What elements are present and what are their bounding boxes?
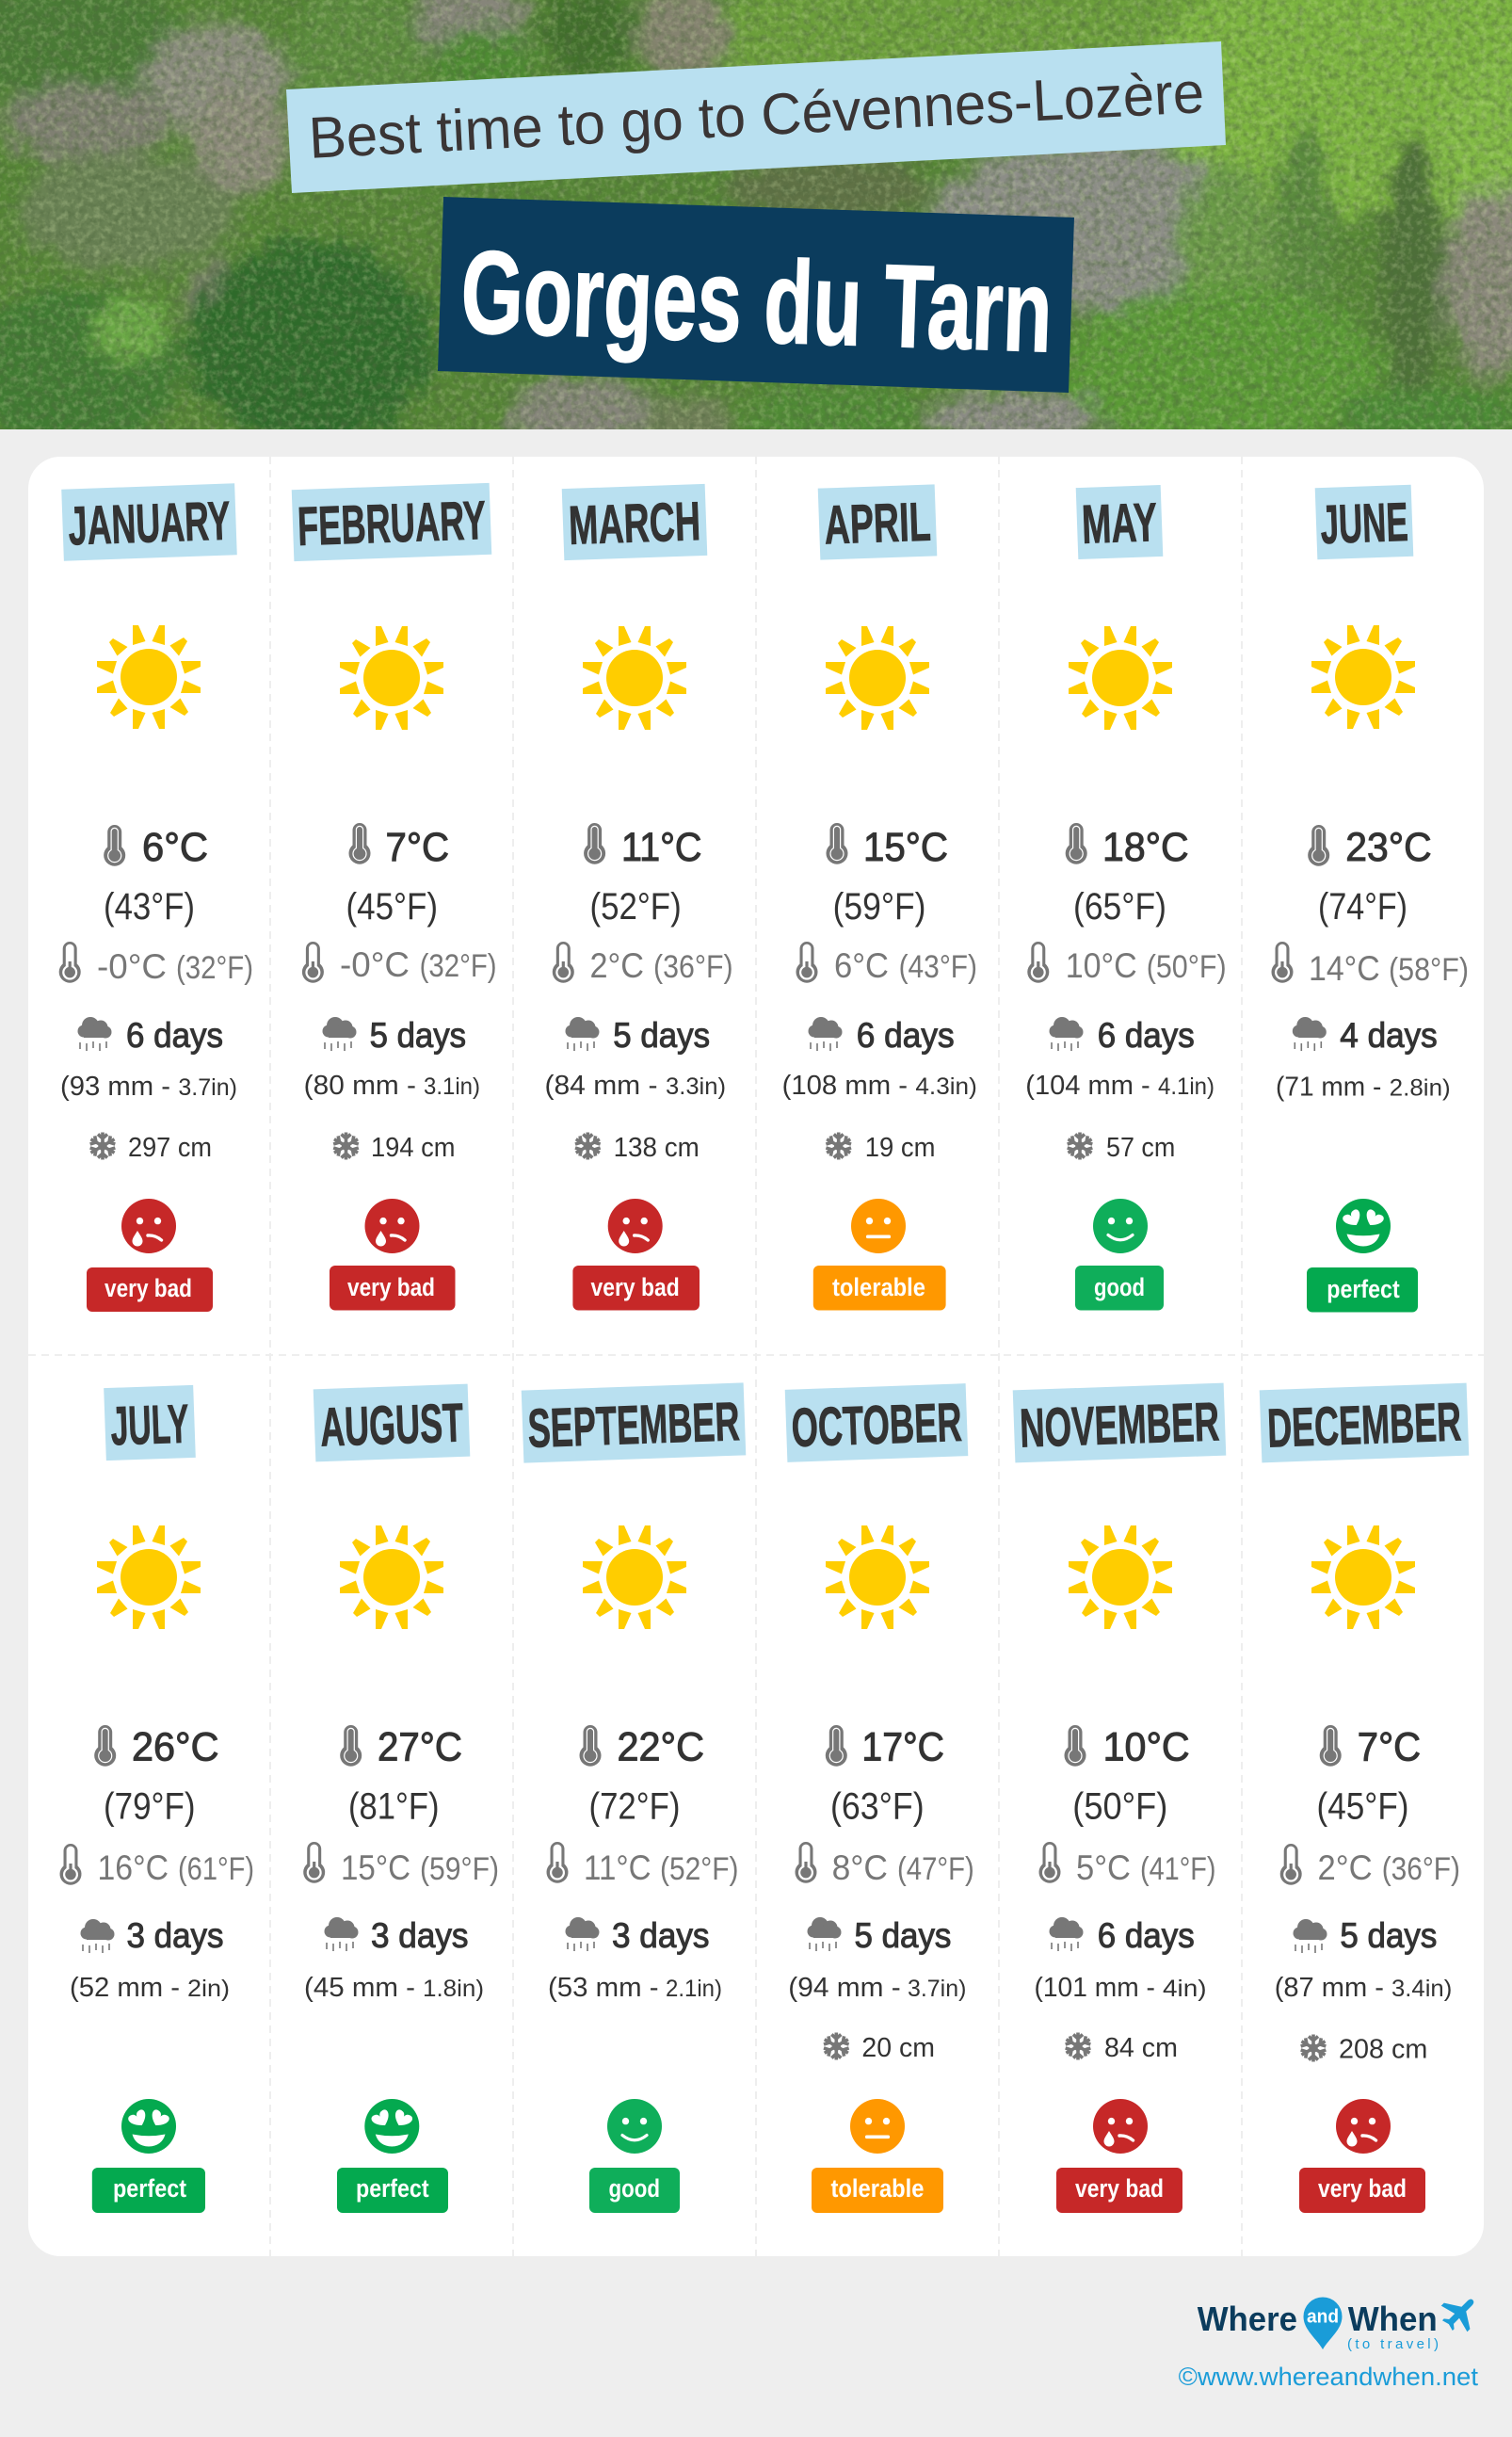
rainfall inches: 4in) [1163,1976,1207,2002]
month label: July [104,1385,196,1461]
rainfall inches: 3.3in) [666,1073,726,1100]
average high temperature: 15°C [863,825,948,870]
low temperature fahrenheit: (58°F) [1389,952,1469,988]
rainfall inches: 2in) [187,1976,230,2002]
rainfall inches: 3.7in) [178,1074,237,1101]
icon: rain cloud [1049,1917,1083,1951]
rainy days: 3 days [126,1916,224,1955]
icon: rain cloud [1293,1017,1327,1051]
rating badge [1307,1267,1418,1313]
rating badge: good [1094,1273,1145,1301]
icon: rain cloud [77,1017,111,1051]
icon: low thermometer [796,942,817,983]
icon: snowflake [822,2032,850,2060]
high temperature fahrenheit: (45°F) [346,886,438,928]
rainy days: 3 days [371,1916,469,1955]
snowfall: 57 cm [1106,1133,1175,1163]
logo: Where and When: When [1348,2300,1438,2338]
average high temperature: 6°C [142,825,208,870]
month label: October [785,1383,968,1462]
rating badge [337,2168,448,2213]
month label: February: FEBRUARY [297,490,487,557]
logo: Where and When [1198,2287,1486,2352]
average high temperature: 22°C [618,1725,704,1770]
low temperature: 16°C [98,1848,169,1887]
icon: crying face [608,1199,663,1253]
icon: sun [340,626,443,730]
icon: thermometer [340,1725,362,1767]
icon: low thermometer [60,1844,81,1885]
rating badge [813,1266,946,1311]
month label: January [61,483,237,561]
rating badge [589,2168,680,2213]
icon: rain cloud [565,1917,599,1951]
average high temperature: 7°C [1358,1725,1421,1770]
rainfall mm: (94 mm - [788,1973,901,2003]
icon: low thermometer [795,1842,817,1883]
rating badge [572,1266,700,1311]
low temperature fahrenheit: (36°F) [1382,1851,1460,1887]
month label: March [562,484,707,560]
month label: February [292,483,491,561]
low temperature: -0°C [340,945,410,984]
title: light banner: Best time to go to Cévennes-Lozère [307,60,1206,171]
icon: heart eyes face [364,2099,419,2154]
rating badge [1056,2168,1182,2213]
average high temperature: 17°C [861,1725,944,1770]
rainfall mm: (80 mm - [304,1071,416,1101]
icon: neutral face [851,1199,906,1253]
snowfall: 194 cm [371,1133,456,1163]
rainy days: 6 days [857,1016,955,1055]
low temperature fahrenheit: (47°F) [897,1851,974,1887]
month: October [785,1383,974,2213]
low temperature: 10°C [1066,946,1137,985]
header photo: Gorges du Tarn [0,0,1512,452]
icon: thermometer [584,823,605,864]
icon: crying face [1093,2099,1148,2154]
low temperature fahrenheit: (50°F) [1147,949,1227,985]
icon: rain cloud [322,1017,356,1051]
icon: snowflake [573,1132,602,1160]
rainfall mm: (108 mm - [782,1071,908,1101]
icon: low thermometer [1271,942,1294,983]
icon: sun [583,1525,686,1629]
month: February [292,483,497,1311]
rating badge [87,1267,213,1312]
icon: snowflake [331,1132,361,1160]
low temperature fahrenheit: (43°F) [899,949,977,985]
month: September [522,1382,746,2213]
average high temperature: 7°C [386,825,449,870]
low temperature: 2°C [589,946,644,985]
icon: heart eyes face [1336,1199,1391,1253]
rainfall mm: (71 mm - [1276,1072,1381,1102]
month: May [1025,485,1227,1311]
low temperature fahrenheit: (36°F) [653,949,733,985]
high temperature fahrenheit: (52°F) [589,886,682,928]
rating badge: perfect [1327,1275,1400,1303]
high temperature fahrenheit: (45°F) [1316,1785,1408,1827]
low temperature: 5°C [1076,1848,1131,1887]
rainfall inches: 2.1in) [666,1976,722,2002]
average high temperature: 11°C [621,825,702,870]
icon: snowflake [88,1132,117,1160]
icon: thermometer [826,1725,847,1767]
icon: thermometer [1308,825,1329,866]
icon: sun [340,1525,443,1629]
snowfall: 208 cm [1339,2034,1427,2064]
month: March [544,484,733,1311]
average high temperature: 27°C [378,1725,462,1770]
snowfall: 84 cm [1104,2033,1178,2063]
low temperature fahrenheit: (32°F) [420,948,497,984]
low temperature: 15°C [341,1848,410,1887]
rainfall inches: 4.1in) [1158,1073,1214,1100]
rainfall mm: (93 mm - [60,1072,170,1102]
rainy days: 6 days [1098,1016,1195,1055]
icon: low thermometer [1280,1844,1302,1885]
high temperature fahrenheit: (81°F) [348,1785,439,1827]
icon: rain cloud [1049,1017,1083,1051]
icon: crying face [365,1199,420,1253]
icon: low thermometer [1027,942,1049,983]
icon: sun [826,1525,929,1629]
icon: low thermometer [1039,1842,1060,1883]
high temperature fahrenheit: (63°F) [830,1785,925,1827]
month label: September [522,1382,746,1463]
month: July [60,1385,254,2213]
icon: smiling face [607,2099,662,2154]
low temperature: 8°C [832,1848,888,1887]
rating badge: very bad [347,1273,435,1301]
high temperature fahrenheit: (43°F) [104,886,195,928]
icon: low thermometer [59,942,81,983]
month: December [1260,1383,1469,2213]
icon: rain cloud [565,1017,599,1051]
icon: sun [1311,625,1415,729]
month label: March: MARCH [568,491,701,557]
icon: rain cloud [808,1917,842,1951]
high temperature fahrenheit: (79°F) [104,1785,196,1827]
icon: sun [826,626,929,730]
month label: May: MAY [1081,492,1158,556]
icon: thermometer [1064,1725,1086,1767]
icon: snowflake [825,1132,853,1160]
rating badge: tolerable [832,1273,925,1301]
average high temperature: 26°C [132,1725,218,1770]
rainfall mm: (101 mm - [1034,1973,1155,2003]
month label: April: APRIL [823,492,932,556]
rating badge [330,1266,456,1311]
icon: low thermometer [302,942,324,983]
rating badge: good [608,2174,660,2203]
month label: October: OCTOBER [791,1392,963,1459]
icon: crying face [121,1199,176,1253]
rainy days: 4 days [1340,1016,1438,1055]
rainy days: 5 days [613,1016,710,1055]
logo: Where and When: (to travel) [1347,2336,1439,2352]
icon: low thermometer [303,1842,325,1883]
icon: thermometer [94,1725,116,1767]
icon: sun [97,1525,201,1629]
low temperature fahrenheit: (41°F) [1140,1851,1216,1887]
rainfall inches: 3.7in) [908,1976,966,2002]
icon: smiling face [1093,1199,1148,1253]
icon: sun [1069,626,1172,730]
month label: September: SEPTEMBER [527,1391,741,1460]
rainfall inches: 1.8in) [423,1976,484,2002]
month label: January: JANUARY [67,491,232,557]
logo: Where and When: and [1307,2307,1339,2328]
rating badge [812,2168,943,2213]
rainfall mm: (52 mm - [70,1973,180,2003]
rainfall mm: (104 mm - [1025,1071,1150,1101]
rating badge: perfect [113,2174,186,2203]
logo: Where and When: Where [1198,2300,1297,2338]
month label: November: NOVEMBER [1019,1391,1220,1460]
high temperature fahrenheit: (72°F) [589,1785,680,1827]
high temperature fahrenheit: (74°F) [1318,886,1407,928]
low temperature fahrenheit: (32°F) [176,950,253,986]
month label: August [314,1384,470,1461]
rainy days: 5 days [855,1916,951,1955]
icon: rain cloud [808,1017,842,1051]
icon: sun [583,626,686,730]
rainy days: 6 days [126,1016,223,1055]
rainfall inches: 3.4in) [1391,1976,1452,2002]
rating badge: very bad [1075,2174,1164,2203]
rainfall inches: 3.1in) [424,1073,480,1100]
snowfall: 297 cm [128,1133,212,1163]
month: January [59,483,253,1312]
low temperature: 2°C [1318,1848,1373,1887]
month label: July: JULY [109,1394,190,1457]
website credit: ©www.whereandwhen.net [1179,2363,1478,2391]
month: June [1271,485,1469,1313]
rating badge [92,2168,205,2213]
rainy days: 6 days [1098,1916,1195,1955]
icon: low thermometer [546,1842,569,1883]
rainfall mm: (84 mm - [544,1071,657,1101]
icon: thermometer [348,823,371,864]
low temperature fahrenheit: (59°F) [420,1851,499,1887]
rating badge: very bad [1318,2174,1407,2203]
snowfall: 19 cm [865,1133,936,1163]
average high temperature: 10°C [1103,1725,1190,1770]
month label: June: JUNE [1319,492,1409,556]
icon: thermometer [1066,823,1087,864]
month: November [1013,1383,1226,2213]
icon: sun [97,625,201,729]
rainfall mm: (87 mm - [1275,1973,1384,2003]
icon: thermometer [827,823,847,864]
title: dark banner: Gorges du Tarn [459,227,1054,377]
rating badge: very bad [105,1274,192,1302]
icon: thermometer [1320,1725,1342,1767]
low temperature: 11°C [584,1848,651,1887]
high temperature fahrenheit: (59°F) [833,886,926,928]
month label: November [1013,1383,1226,1462]
low temperature: 6°C [834,946,889,985]
rating badge: very bad [591,1273,680,1301]
icon: snowflake [1066,1132,1094,1160]
month label: May [1076,485,1163,559]
low temperature: 14°C [1309,949,1380,988]
icon: thermometer [104,825,125,866]
icon: crying face [1336,2099,1391,2154]
rainy days: 3 days [612,1916,710,1955]
rating badge: tolerable [830,2174,925,2203]
icon: rain cloud [324,1917,358,1951]
icon: rain cloud [1294,1919,1327,1953]
high temperature fahrenheit: (50°F) [1072,1785,1167,1827]
rainfall inches: 2.8in) [1390,1075,1451,1102]
month label: April [818,484,937,560]
rating badge: perfect [356,2174,429,2203]
icon: heart eyes face [121,2099,176,2154]
rainy days: 5 days [1340,1916,1437,1955]
average high temperature: 23°C [1345,825,1432,870]
icon: sun [1069,1525,1172,1629]
icon: low thermometer [553,942,574,983]
snowfall: 20 cm [861,2033,935,2063]
snowfall: 138 cm [614,1133,700,1163]
panel: monthly card [28,457,1484,2256]
icon: thermometer [580,1725,601,1767]
icon: snowflake [1299,2034,1327,2062]
low temperature fahrenheit: (61°F) [178,1851,254,1887]
rainy days: 5 days [370,1016,466,1055]
month: August [303,1384,499,2213]
icon: sun [1311,1525,1415,1629]
rainfall inches: 4.3in) [915,1073,977,1100]
high temperature fahrenheit: (65°F) [1073,886,1166,928]
rating badge [1299,2168,1425,2213]
rainfall mm: (45 mm - [304,1973,415,2003]
average high temperature: 18°C [1102,825,1189,870]
month: April [782,484,977,1311]
title: dark banner [438,197,1074,393]
month label: June [1315,485,1413,559]
icon: neutral face [850,2099,905,2154]
low temperature fahrenheit: (52°F) [660,1851,738,1887]
low temperature: -0°C [97,947,167,986]
rating badge [1075,1266,1164,1311]
icon: snowflake [1064,2032,1092,2060]
icon: rain cloud [81,1919,115,1953]
month label: August: AUGUST [319,1392,464,1459]
rainfall mm: (53 mm - [548,1973,659,2003]
